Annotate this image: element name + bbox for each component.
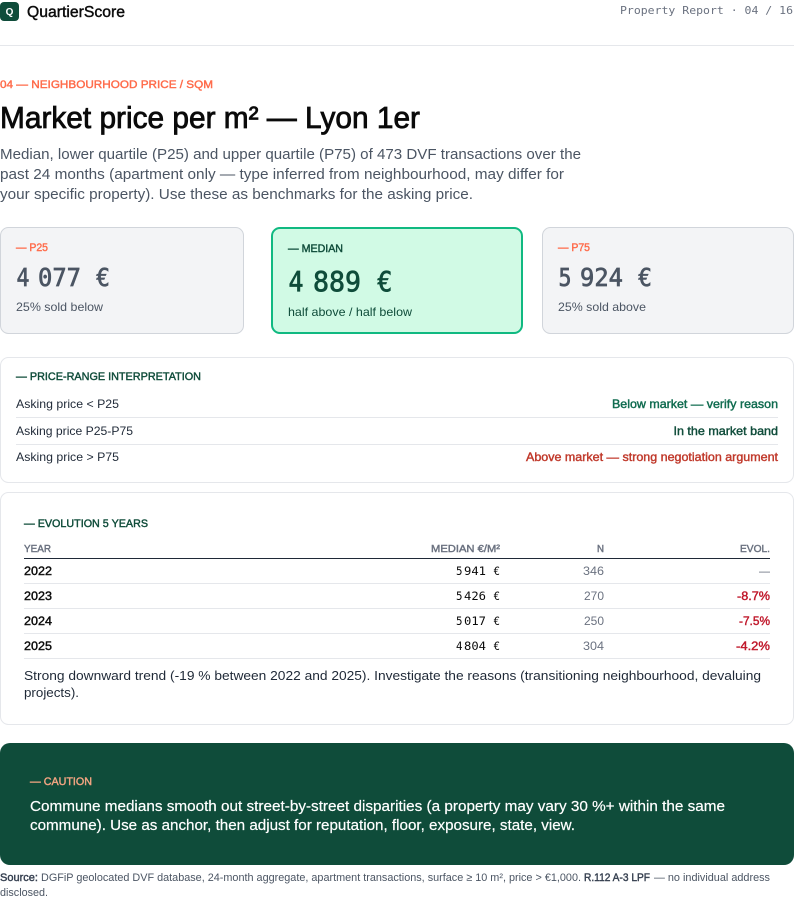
row: above P75: Asking price > P75 [16, 450, 119, 464]
card: median: — MEDIAN [288, 243, 343, 255]
value: 924 [580, 263, 623, 292]
value [16, 263, 110, 292]
value: 4 [16, 263, 30, 292]
row 2024: 2024 [24, 614, 52, 628]
card: P75: — P75 [558, 242, 590, 254]
row: below P25: Below market — verify reason [612, 397, 778, 411]
row 2025: 804 [464, 639, 486, 653]
source note: Source: [0, 872, 38, 884]
panel: price-range interpretation [0, 358, 794, 482]
row 2022: 5 [456, 564, 462, 578]
row 2024: -7.5% [739, 614, 770, 628]
icon: QuartierScore logo: Q [6, 7, 14, 18]
row 2023: 270 [584, 589, 604, 603]
page reference: Property Report · 04 / 16 [620, 5, 793, 17]
card: median [272, 228, 522, 333]
row: above P75 [16, 450, 779, 464]
intro text: your specific property). Use these as benchmarks for the asking price. [0, 186, 473, 203]
source note: DGFiP geolocated DVF database, 24-month aggregate, apartment transactions, surface ≥ 10 m², price > €1,000. [41, 872, 581, 884]
panel heading: — PRICE-RANGE INTERPRETATION [16, 371, 201, 383]
row: P25-P75: In the market band [674, 424, 778, 438]
row: above P75: Above market — strong negotiation argument [526, 450, 779, 464]
table header: N [597, 544, 604, 555]
title: Market price per m² — Lyon 1er [0, 101, 420, 135]
row 2022 [24, 564, 770, 578]
card: P25: 25% sold below [16, 300, 103, 314]
row: below P25 [16, 397, 778, 411]
source note [0, 872, 770, 899]
callout: caution: commune). Use as anchor, then adjust for reputation, floor, exposure, state, view. [30, 817, 575, 834]
row 2024: € [494, 614, 500, 628]
value: € [638, 263, 652, 292]
intro text [0, 146, 581, 203]
row 2025: € [494, 639, 500, 653]
value [288, 265, 392, 298]
row 2023: 426 [464, 589, 486, 603]
panel heading: — EVOLUTION 5 YEARS [24, 518, 148, 530]
callout: caution [0, 743, 794, 865]
trend note [24, 668, 761, 700]
header [0, 2, 794, 46]
trend note: projects). [24, 685, 79, 700]
panel: evolution 5 years [0, 492, 794, 724]
brand name: QuartierScore [27, 4, 125, 21]
row 2024: 250 [584, 614, 604, 628]
row: below P25: Asking price < P25 [16, 397, 119, 411]
card: P25 [0, 228, 244, 334]
row 2023: 5 [456, 589, 462, 603]
value: 4 [288, 265, 304, 298]
row 2023: € [494, 589, 500, 603]
trend note: Strong downward trend (-19 % between 2022 and 2025). Investigate the reasons (transitioning neighbourhood, devaluing [24, 668, 761, 683]
callout: caution: Commune medians smooth out street-by-street disparities (a property may vary 30 %+ within the same [30, 798, 725, 815]
intro text: Median, lower quartile (P25) and upper quartile (P75) of 473 DVF transactions over the [0, 146, 581, 163]
eyebrow label: 04 — NEIGHBOURHOOD PRICE / SQM [0, 79, 213, 91]
value: 077 [38, 263, 81, 292]
table header: EVOL. [740, 544, 770, 555]
value: € [377, 265, 392, 298]
row 2024: 5 [456, 614, 462, 628]
icon: QuartierScore logo [0, 2, 19, 21]
row 2025: -4.2% [736, 639, 770, 653]
callout: caution: — CAUTION [30, 776, 92, 788]
value: 889 [313, 265, 361, 298]
table header [24, 544, 770, 555]
table [24, 544, 770, 659]
row 2022: € [494, 564, 500, 578]
row 2022: 2022 [24, 564, 52, 578]
row 2022: 346 [583, 564, 604, 578]
row 2025 [24, 639, 770, 653]
row 2022: — [759, 564, 770, 578]
row 2023 [24, 589, 770, 603]
row 2025: 4 [456, 639, 463, 653]
card: P75: 25% sold above [558, 300, 646, 314]
source note: — no individual address [654, 872, 770, 884]
row 2022: 941 [464, 564, 486, 578]
row 2023: 2023 [24, 589, 52, 603]
value: 5 [558, 263, 572, 292]
card: median: half above / half below [288, 305, 412, 319]
row: P25-P75: Asking price P25-P75 [16, 424, 133, 438]
source note: R.112 A-3 LPF [584, 872, 650, 884]
intro text: past 24 months (apartment only — type inferred from neighbourhood, may differ for [0, 166, 564, 183]
table header: YEAR [24, 544, 51, 555]
source note: disclosed. [0, 887, 48, 899]
row 2023: -8.7% [737, 589, 770, 603]
row: P25-P75 [16, 424, 778, 438]
value [558, 263, 652, 292]
row 2024: 017 [464, 614, 486, 628]
table header: MEDIAN €/M² [431, 544, 501, 555]
card: P25: — P25 [16, 242, 48, 254]
card: P75 [542, 228, 794, 334]
row 2025: 304 [583, 639, 604, 653]
value: € [96, 263, 110, 292]
row 2024 [24, 614, 770, 628]
row 2025: 2025 [24, 639, 52, 653]
